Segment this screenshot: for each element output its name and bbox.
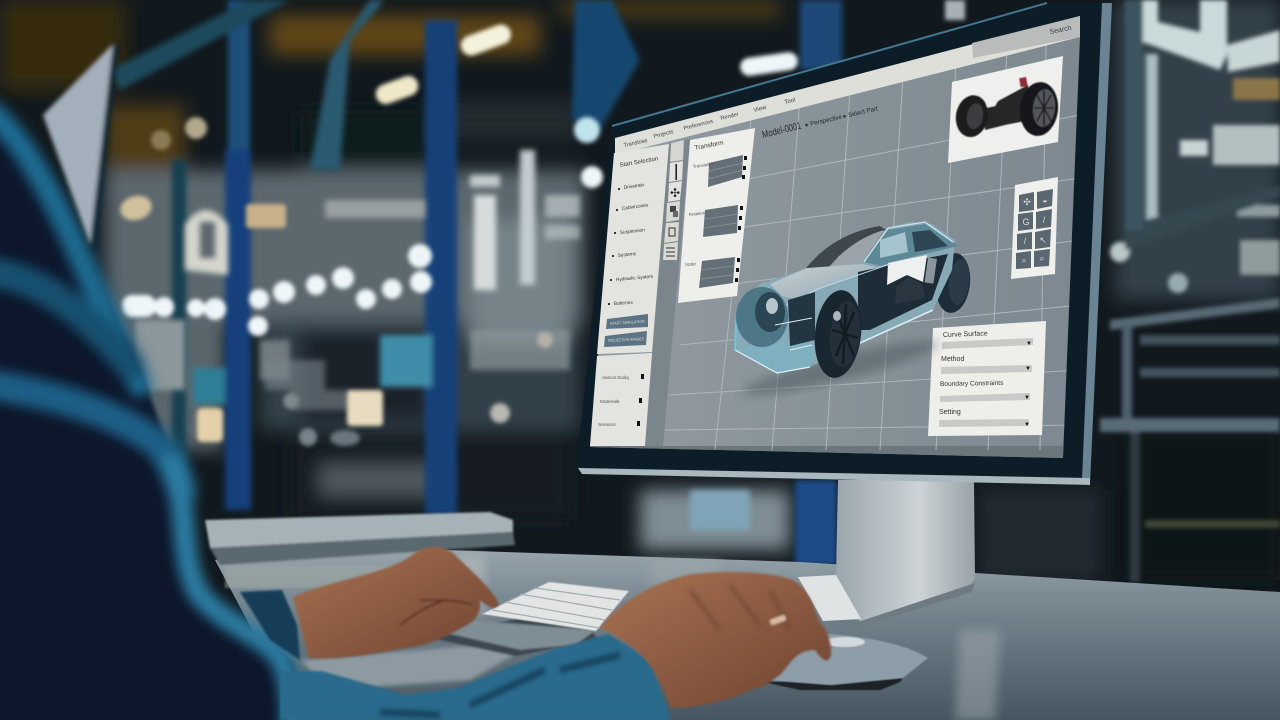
left panel: part selection: [597, 144, 669, 354]
right hand: [600, 572, 831, 708]
menu bar: Translose: [623, 138, 648, 149]
front bumper glow: [735, 340, 815, 373]
pale factory machinery: [135, 150, 580, 410]
curve surface panel: ▼: [1024, 395, 1030, 401]
breadcrumb title: ▸ Perspective ▸ Select Part: [805, 105, 879, 129]
button: start simulation: START SIMULATION: [610, 319, 645, 326]
body highlight line: [860, 310, 933, 343]
transform panel: Scale: [685, 261, 697, 267]
tool icons strip: [663, 140, 684, 260]
curve surface panel: [928, 321, 1046, 436]
icon palette: ✣: [1023, 197, 1031, 207]
icon palette: ◒: [1042, 195, 1048, 205]
lower left panel: settings: Advanced Shading: [602, 375, 629, 380]
front wheel arch glass dome: [736, 287, 788, 347]
monitor stand: [798, 480, 975, 626]
front wheel: [811, 288, 865, 380]
lower left panel: settings: [590, 353, 652, 446]
forearm sleeve: [280, 634, 671, 720]
menu bar: Render: [720, 112, 739, 122]
shirt cuff at left wrist: [240, 590, 300, 660]
car: transparent 3D model: [735, 222, 973, 404]
icon palette: ⌕: [1039, 253, 1045, 263]
button: projection ranges: [604, 331, 647, 347]
curve surface panel: ▼: [1025, 366, 1031, 372]
left panel: part selection: Start Selection: [619, 156, 659, 169]
transform panel: [678, 128, 755, 303]
menu bar: Projects: [653, 129, 674, 140]
icon palette: /: [1024, 236, 1027, 246]
body shell: [735, 222, 955, 373]
transform panel: Translation: [692, 161, 715, 169]
lower left panel: settings: Sensors: [598, 422, 616, 428]
menu bar: Preferences: [683, 119, 714, 132]
left panel: part selection: Hydraulic System: [616, 274, 653, 283]
silver hood: [770, 264, 880, 300]
monitor: [578, 3, 1112, 485]
transform panel: Transform: [694, 139, 724, 152]
lower left panel: settings: Materials: [600, 399, 620, 405]
bokeh lights: [117, 22, 799, 446]
curve surface panel: Method: [941, 356, 964, 363]
desk surface: [215, 545, 1280, 720]
roof arc: [806, 226, 886, 268]
rear wheel: [933, 251, 973, 315]
interior mechanics: [858, 254, 948, 330]
curve surface panel: Curve Surface: [943, 330, 988, 339]
menu bar: Search: [1049, 25, 1072, 36]
left panel: part selection: Drivetrain: [623, 182, 645, 191]
menu bar: [615, 16, 1080, 155]
screen: 3D viewport grid: [665, 40, 1080, 450]
monitor outer casing: [578, 3, 1112, 484]
button: start simulation: [606, 314, 648, 329]
thumbnail panel: chassis render: [948, 56, 1063, 163]
metal tray behind keyboard: [205, 512, 515, 588]
menu bar: View: [753, 105, 768, 114]
breadcrumb title: Model-0001: [761, 120, 803, 141]
left panel: part selection: Batteries: [614, 300, 634, 307]
curve surface panel: ▼: [1024, 422, 1030, 428]
menu bar: Tool: [784, 97, 796, 106]
left panel: part selection: Systems: [618, 251, 637, 259]
small background monitor behind person: [43, 44, 118, 250]
transform panel: Rotation: [689, 210, 706, 217]
icon palette: /: [1043, 215, 1046, 225]
right factory racks: [945, 0, 1280, 582]
curve surface panel: Boundary Constraints: [940, 380, 1004, 388]
left hand: [293, 547, 499, 658]
icon palette: G: [1022, 217, 1030, 227]
glass cabin: [864, 224, 958, 266]
left panel: part selection: Cabin/zones: [621, 202, 649, 212]
tool icons strip: ✣: [670, 186, 680, 200]
icon palette: [1011, 177, 1058, 279]
screen: workspace: [590, 37, 1080, 458]
icon palette: ↖: [1039, 235, 1047, 245]
breadcrumb title: [761, 105, 879, 141]
button: projection ranges: PROJECTION RANGES: [608, 336, 644, 343]
icon palette: ⌕: [1021, 255, 1027, 265]
toolbar column: [645, 139, 690, 446]
mouse: [764, 634, 928, 690]
person: dark navy shirt with teal folds: [0, 0, 302, 720]
curve surface panel: Setting: [939, 409, 961, 416]
left panel: part selection: Suspension: [620, 227, 645, 236]
curve surface panel: ▼: [1026, 341, 1032, 347]
keyboard: [431, 582, 629, 656]
